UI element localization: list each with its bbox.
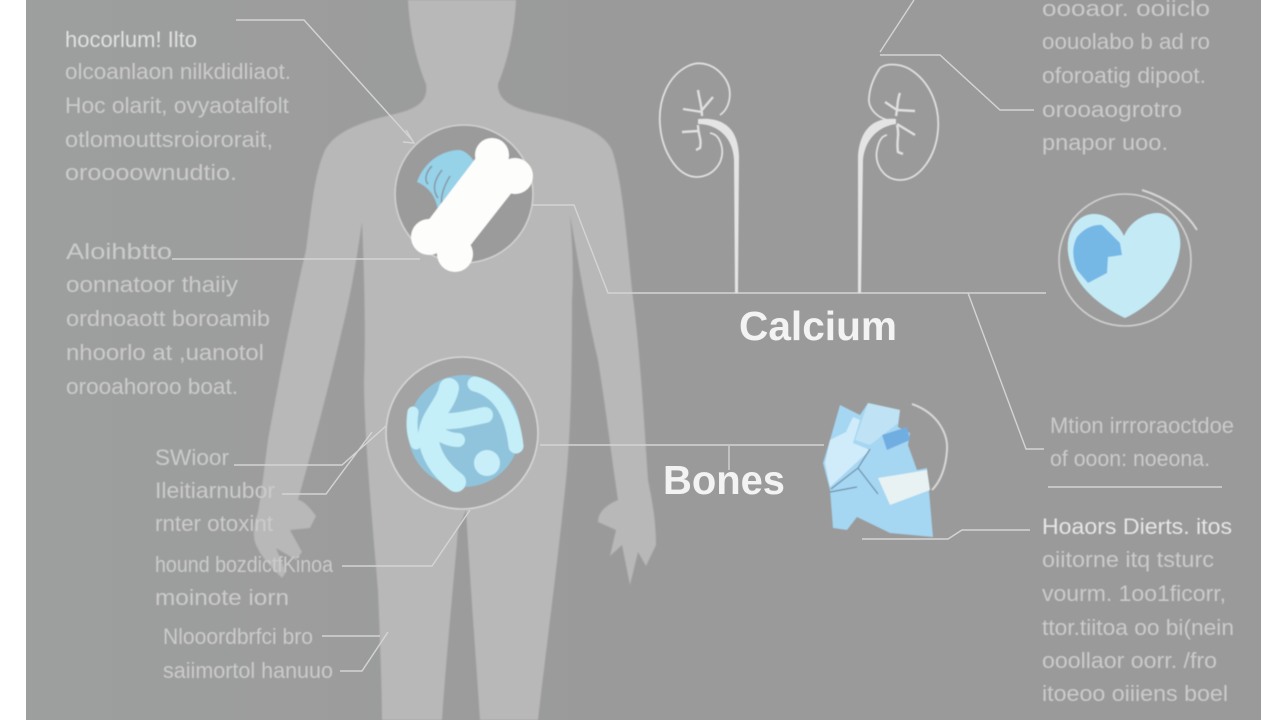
text block: lower left: SWioor <box>155 445 229 470</box>
text block: middle left: nhoorlo at ,uanotol <box>66 340 264 365</box>
text block: middle right: Mtion irrroraoctdoe <box>1050 413 1234 438</box>
text block: lower right: Hoaors Dierts. itos <box>1042 514 1232 539</box>
text block: upper left: hocorlum! Ilto <box>65 27 197 52</box>
text block: middle left: ordnoaott boroamib <box>66 306 270 331</box>
icon: heart in circle <box>1059 190 1197 326</box>
text block: lower right <box>1042 514 1234 706</box>
text block: lower right: itoeoo oiiiens boel <box>1042 681 1228 706</box>
text block: middle left <box>66 239 270 399</box>
text block: upper left: Hoc olarit, ovyaotalfolt <box>65 93 289 118</box>
text block: middle left: Aloihbtto <box>66 239 172 264</box>
text block: upper right: oforoatig dipoot. <box>1042 63 1206 88</box>
text block: middle right: of ooon: noeona. <box>1050 446 1210 471</box>
label: Calcium: Calcium <box>739 303 897 349</box>
text block: upper right: pnapor uoo. <box>1042 130 1168 155</box>
icon: anatomical heart <box>823 403 947 537</box>
text block: middle right <box>1050 413 1234 471</box>
text block: lower right: vourm. 1oo1ficorr, <box>1042 581 1226 606</box>
text block: upper left: otlomouttsroiororait, <box>65 127 273 152</box>
text block: lower left: rnter otoxint <box>155 511 273 536</box>
text block: lower left: Ileitiarnubor <box>155 478 275 503</box>
icon: bone in circle <box>395 125 533 272</box>
text block: upper left <box>65 27 291 185</box>
text block: upper right: oouolabo b ad ro <box>1042 29 1210 54</box>
text block: middle left: oonnatoor thaiiy <box>66 272 238 297</box>
icon: intestine in circle <box>386 357 538 509</box>
human body silhouette <box>254 0 656 720</box>
connector lines <box>172 0 1222 671</box>
text block: upper left: olcoanlaon nilkdidliaot. <box>65 59 291 84</box>
text block: lower left: Nlooordbrfci bro <box>163 624 313 649</box>
text block: lower right: oiitorne itq tsturc <box>1042 547 1214 572</box>
text block: lower right: ttor.tiitoa oo bi(nein <box>1042 615 1234 640</box>
text block: lower right: ooollaor oorr. /fro <box>1042 648 1217 673</box>
text block: upper right: orooaogrotro <box>1042 97 1182 122</box>
text block: upper right <box>1042 0 1210 155</box>
text block: lower left: saiimortol hanuuo <box>163 658 333 683</box>
label: Bones: Bones <box>663 457 785 503</box>
icon: left kidney <box>660 63 739 293</box>
text block: lower left: moinote iorn <box>155 585 289 610</box>
icon: right kidney <box>858 65 938 293</box>
text block: lower left <box>155 445 334 683</box>
text block: upper left: oroooownudtio. <box>65 160 237 185</box>
text block: lower left: hound bozdictfKinoa <box>155 552 334 577</box>
text block: middle left: orooahoroo boat. <box>66 374 238 399</box>
